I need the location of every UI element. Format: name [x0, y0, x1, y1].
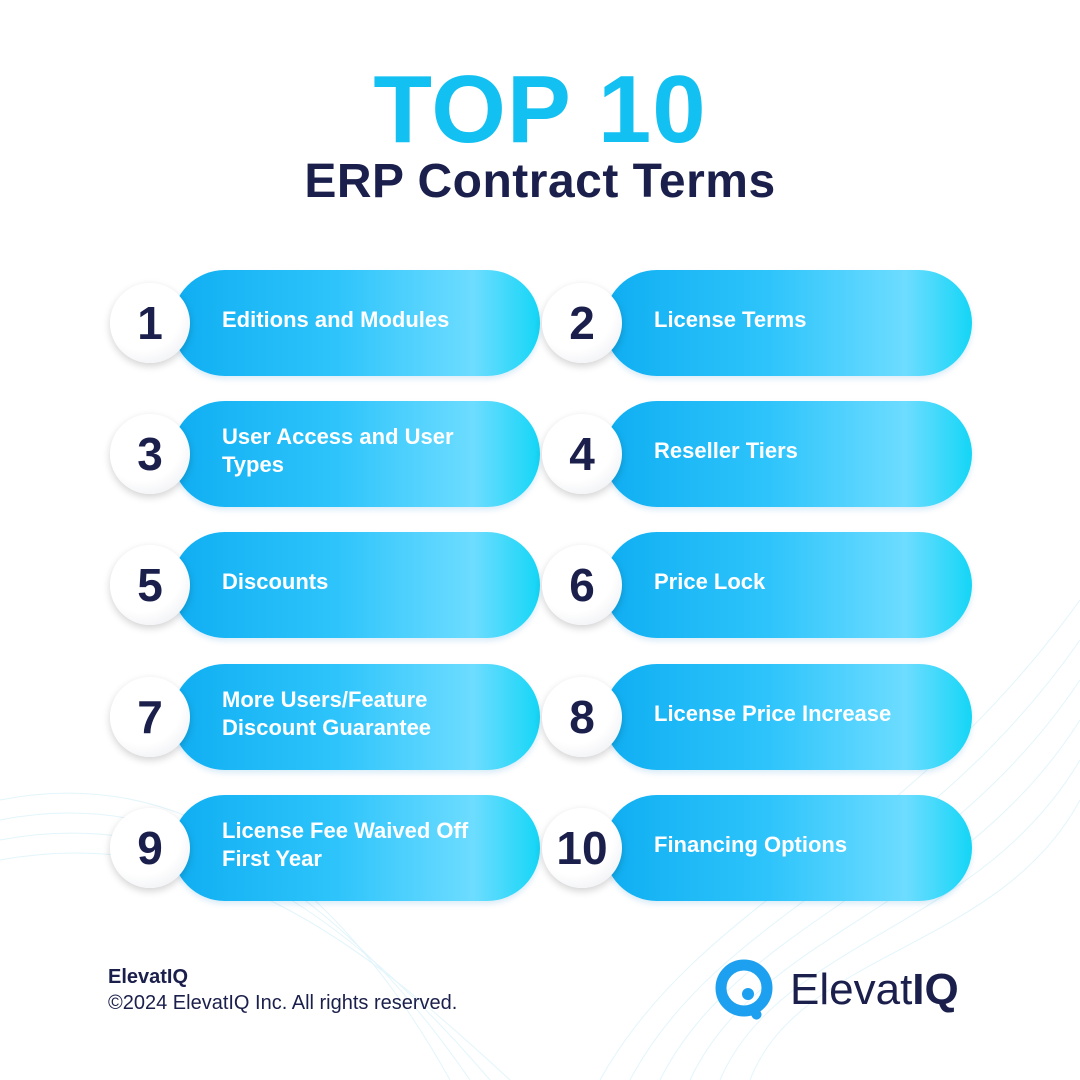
item 6: 6: [569, 559, 595, 611]
logo text: ElevatIQ: [790, 965, 959, 1014]
item 1: 1: [137, 297, 163, 349]
item 9: License Fee Waived Off First Year: [222, 818, 468, 871]
item 1: Editions and Modules: [222, 307, 449, 332]
icon: logo Q: [716, 960, 772, 1020]
item 10: Financing Options: [654, 832, 847, 857]
item 2: [539, 270, 974, 381]
item 7: [107, 664, 542, 775]
item 5: Discounts: [222, 569, 328, 594]
item 5: [107, 532, 542, 643]
item 4: Reseller Tiers: [654, 438, 798, 463]
footer text: ElevatIQ: [108, 966, 188, 988]
item 5: 5: [137, 559, 163, 611]
item 1: [107, 270, 542, 381]
footer text: [108, 966, 457, 1014]
item 6: [539, 532, 974, 643]
subtitle: ERP Contract Terms: [304, 155, 776, 208]
item 3: User Access and User Types: [222, 424, 454, 477]
item 8: License Price Increase: [654, 701, 891, 726]
item 10: 10: [556, 822, 608, 874]
item 4: [539, 401, 974, 512]
item 4: 4: [569, 428, 595, 480]
item 2: 2: [569, 297, 595, 349]
item 7: More Users/Feature Discount Guarantee: [222, 687, 431, 740]
item 8: 8: [569, 691, 595, 743]
title: TOP 10: [373, 56, 707, 163]
item 9: [107, 795, 542, 906]
item 7: 7: [137, 691, 163, 743]
item 10: [539, 795, 974, 906]
logo: [716, 960, 959, 1020]
item 9: 9: [137, 822, 163, 874]
item 8: [539, 664, 974, 775]
item 3: [107, 401, 542, 512]
item 3: 3: [137, 428, 163, 480]
item 6: Price Lock: [654, 569, 765, 594]
footer text: ©2024 ElevatIQ Inc. All rights reserved.: [108, 992, 457, 1014]
item 2: License Terms: [654, 307, 806, 332]
